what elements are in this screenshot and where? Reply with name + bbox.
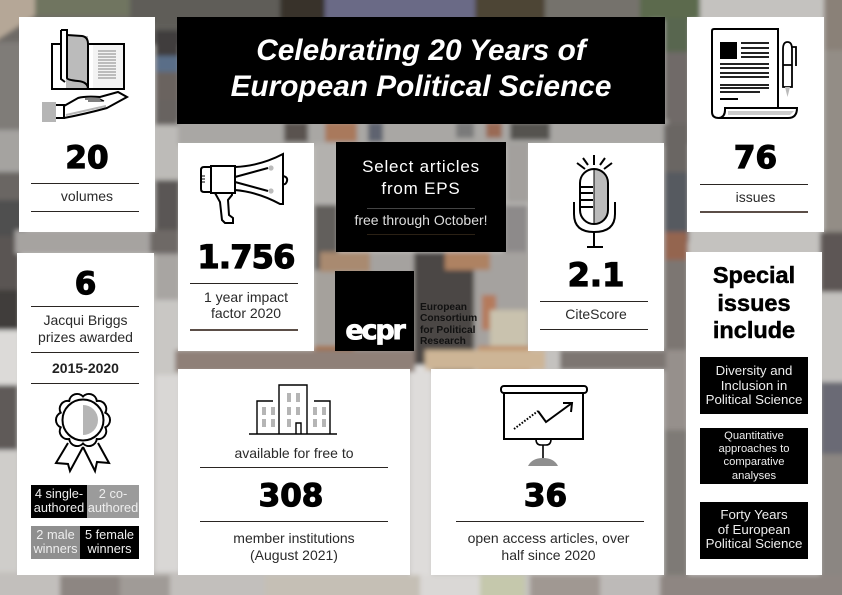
item: Forty Years (700, 502, 808, 559)
item: Forty Years: Forty Years (720, 507, 788, 522)
panel: Jacqui Briggs prizes (17, 253, 154, 575)
item: Quantitative approaches (700, 428, 808, 484)
title text: Celebrating 20 Years of (256, 34, 586, 67)
stat: 4 single-authored (31, 485, 87, 518)
label: member institutions (233, 530, 355, 563)
label: issues: issues (736, 189, 775, 205)
icon: buildings (249, 384, 337, 435)
logo caption (420, 302, 477, 347)
callout: select articles free (336, 142, 506, 252)
label: open access articles (468, 530, 630, 563)
label: open access articles: half since 2020 (501, 547, 596, 563)
icon: book on open hand (42, 29, 129, 122)
stat: 5 female winners: 5 female (85, 527, 134, 542)
label: 2015-2020: 2015-2020 (52, 360, 119, 376)
item: Diversity and Inclusion: Inclusion in (721, 378, 787, 392)
panel: special issues (686, 252, 822, 575)
item: Diversity and Inclusion: Diversity and (716, 363, 792, 378)
number: 1.756: 1.756 (197, 238, 295, 276)
number: 76: 76 (734, 140, 777, 176)
callout heading: Select articles (362, 157, 480, 176)
panel: impact factor (178, 143, 314, 351)
number: 2.1: 2.1 (568, 256, 624, 294)
panel: issues (687, 17, 824, 232)
logo caption: Research (420, 336, 466, 347)
stat: 2 co-authored: 2 co- (99, 486, 127, 501)
stat: 4 single-authored: 4 single- (35, 486, 83, 501)
label: member institutions: (August 2021) (250, 547, 338, 563)
label: prizes awarded: prizes awarded (38, 329, 133, 345)
heading: special issues include: issues (717, 290, 791, 316)
icon: microphone (573, 155, 616, 248)
number: 36: 36 (524, 478, 567, 514)
stat: 4 single-authored: authored (34, 500, 84, 515)
panel: volumes (19, 17, 155, 232)
stat: 2 male winners: winners (33, 541, 78, 556)
icon: megaphone (200, 152, 288, 224)
number: 20: 20 (65, 140, 109, 176)
number: 6: 6 (75, 266, 96, 302)
title banner (177, 17, 665, 124)
item: Diversity and Inclusion: Political Science (706, 392, 802, 407)
logo caption: Consortium (420, 313, 477, 324)
label: CiteScore: CiteScore (565, 306, 627, 322)
heading: special issues include (713, 262, 795, 343)
stat: 2 co-authored (87, 485, 139, 518)
panel: open access articles (431, 369, 664, 575)
label: 1 year impact factor 2020: 1 year impact (204, 289, 288, 305)
label: open access articles: open access articles, over (468, 530, 629, 546)
heading: special issues include: Special (713, 262, 795, 288)
title text (231, 34, 611, 103)
label: 1 year impact factor 2020: factor 2020 (211, 305, 281, 321)
label: volumes: volumes (61, 188, 113, 204)
label: prizes awarded: Jacqui Briggs (43, 312, 128, 328)
logo caption: for Political (420, 325, 475, 336)
stat: 5 female winners: winners (87, 541, 132, 556)
item: Diversity and Inclusion (700, 357, 808, 414)
item: Quantitative approaches: comparative (724, 456, 784, 468)
logo wordmark: ecpr (345, 315, 404, 346)
title text: European Political Science (231, 70, 611, 103)
stat: 2 co-authored: authored (88, 500, 138, 515)
logo: ecpr (335, 271, 414, 351)
item: Forty Years: Political Science (706, 536, 802, 551)
label: 1 year impact factor 2020 (204, 289, 288, 321)
panel: member institutions (178, 369, 410, 575)
stat: 2 male winners: 2 male (36, 527, 75, 542)
stat: 2 male winners (31, 526, 80, 559)
callout heading (362, 157, 480, 198)
item: Quantitative approaches: Quantitative (724, 430, 784, 442)
icon: presentation screen with chart (500, 385, 588, 466)
panel: CiteScore (528, 143, 664, 351)
icon: paper and pen (711, 28, 798, 119)
number: 308: 308 (259, 478, 323, 514)
callout note: free through October! (354, 212, 488, 228)
item: Quantitative approaches: analyses (732, 470, 776, 482)
label: prizes awarded (38, 312, 133, 345)
logo caption: European (420, 302, 467, 313)
label: member institutions: member institutions (233, 530, 355, 546)
item: Quantitative approaches: approaches to (719, 443, 789, 455)
icon: rosette award (54, 393, 111, 474)
item: Forty Years: of European (718, 522, 790, 536)
stat: 5 female winners (80, 526, 139, 559)
heading: special issues include: include (713, 317, 795, 343)
callout heading: from EPS (381, 179, 461, 198)
label: available for free to: available for free to (234, 445, 354, 461)
